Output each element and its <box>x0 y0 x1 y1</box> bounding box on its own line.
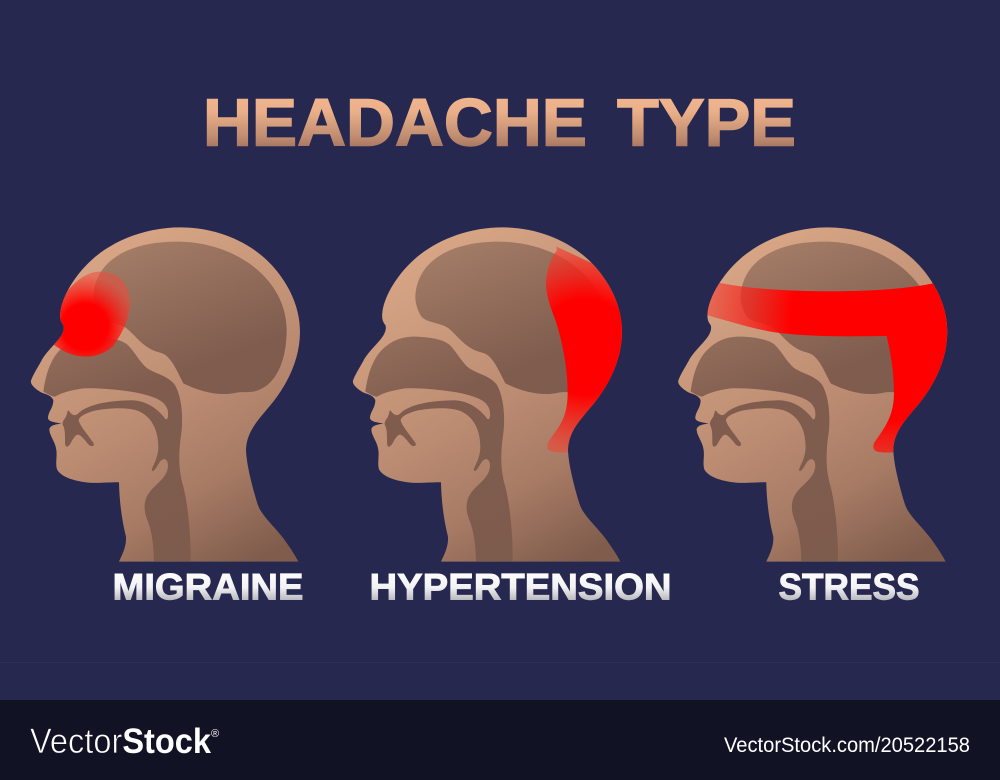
hypertension pain area <box>546 246 622 452</box>
footer bar <box>0 700 1000 780</box>
stress pain area <box>707 283 948 452</box>
label: migraine: MIGRAINE <box>112 566 304 608</box>
panel: hypertension head <box>353 227 642 562</box>
title <box>203 86 796 160</box>
title: TYPE <box>617 86 796 160</box>
footer registered mark: ® <box>211 728 219 740</box>
migraine pain area <box>50 272 130 357</box>
footer image id: VectorStock.com/20522158 <box>724 734 970 757</box>
footer logo: VectorStock <box>30 722 211 761</box>
panel: migraine head <box>31 227 300 562</box>
label: hypertension: HYPERTENSION <box>370 566 672 608</box>
title: HEADACHE <box>203 86 587 160</box>
panel: stress head <box>678 227 967 562</box>
label: stress: STRESS <box>778 566 920 608</box>
